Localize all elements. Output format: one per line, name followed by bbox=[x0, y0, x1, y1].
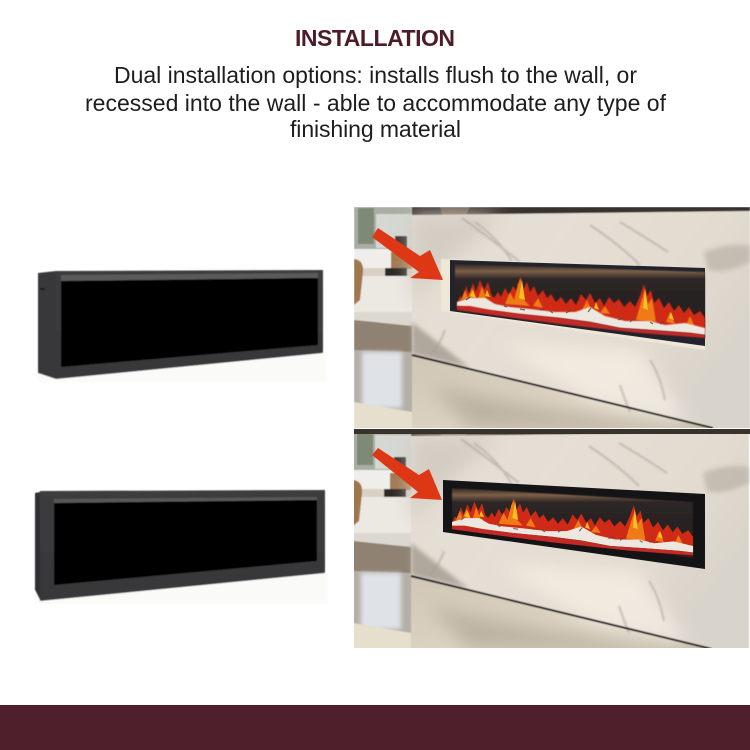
fireplace surface mounted bbox=[443, 480, 705, 569]
photo: surface installation bbox=[353, 428, 750, 653]
description text: Dual installation options: installs flush to the wall, or bbox=[114, 62, 637, 88]
description text: recessed into the wall - able to accommodate any type of bbox=[85, 90, 667, 116]
footer band bbox=[0, 705, 750, 750]
fireplace flush bbox=[450, 260, 705, 346]
description text bbox=[85, 62, 667, 142]
product: recessed unit, flush view bbox=[38, 270, 326, 382]
title: INSTALLATION bbox=[295, 25, 455, 51]
product: surface mounted unit bbox=[35, 490, 328, 604]
photo: flush installation bbox=[354, 207, 750, 432]
description text: finishing material bbox=[290, 116, 461, 142]
arrow bbox=[372, 448, 442, 500]
recess edge around fireplace bbox=[441, 259, 705, 350]
arrow bbox=[372, 228, 443, 280]
top strip of photo two bbox=[354, 429, 750, 434]
